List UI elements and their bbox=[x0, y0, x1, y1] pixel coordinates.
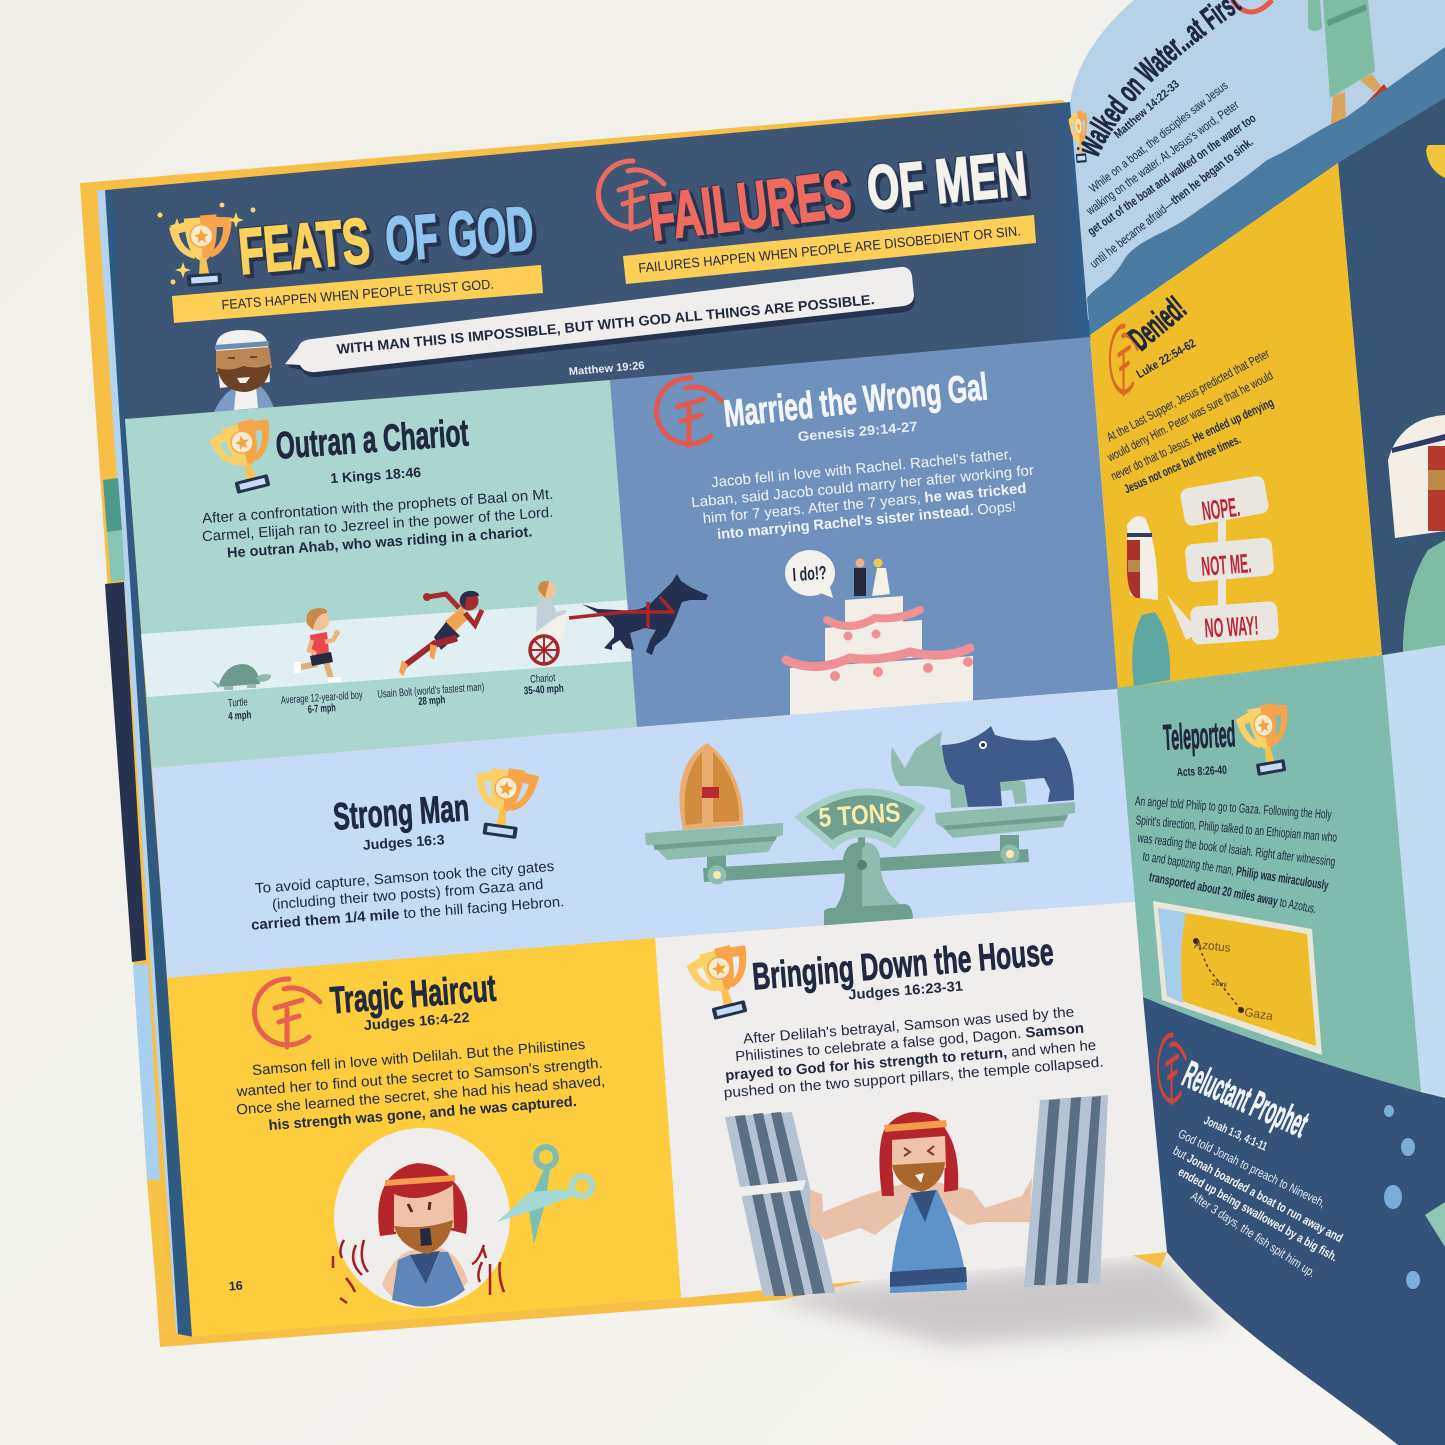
body text: walking on the water. At Jesus's word, Peter bbox=[1083, 98, 1242, 218]
chart labels: speeds: 6-7 mph bbox=[307, 702, 336, 716]
body text: prayed to God for his strength to return, and when he bbox=[725, 1038, 1097, 1084]
body text: get out of the boat and walked on the water too bbox=[1085, 111, 1259, 238]
speech bubble: verse bbox=[285, 267, 915, 377]
heading: Failures of Men bbox=[598, 140, 1030, 254]
icon: header trophy bbox=[168, 213, 236, 288]
racer: boy bbox=[294, 608, 341, 682]
panel: Teleported: Teleported bbox=[1162, 713, 1236, 758]
body text: Carmel, Elijah ran to Jezreel in the power of the Lord. bbox=[202, 505, 554, 545]
sparkles bbox=[158, 202, 256, 284]
body text: until he became afraid—then he began to sink. bbox=[1087, 135, 1256, 271]
speech bubble: I do!?: I do!? bbox=[792, 563, 827, 586]
reference: Judges 16:3 bbox=[362, 831, 445, 853]
speech bubbles: denials: NOT ME. bbox=[1200, 548, 1252, 582]
left page navy margin bbox=[105, 190, 194, 1337]
speech bubbles: denials: NO WAY! bbox=[1204, 611, 1259, 643]
map: Azotus to Gaza: Gaza bbox=[1243, 1005, 1274, 1023]
illustration: robed figure walking on water bbox=[1308, 0, 1388, 138]
illustration: falling hair bbox=[333, 1240, 504, 1303]
chart labels: speeds bbox=[227, 672, 564, 723]
body text: him for 7 years. After the 7 years, he was tricked bbox=[702, 481, 1027, 527]
illustration: wedding cake bbox=[786, 558, 973, 716]
racer: Usain Bolt bbox=[399, 591, 482, 676]
reference: Luke 22:54-62 bbox=[1134, 336, 1198, 381]
body text bbox=[235, 1037, 606, 1134]
speech bubble: I do!? bbox=[785, 550, 835, 598]
body text: Jacob fell in love with Rachel. Rachel's father, bbox=[711, 447, 1013, 491]
icon: trophy bbox=[207, 415, 284, 497]
speech bubble: verse: WITH MAN THIS IS IMPOSSIBLE, BUT WITH GOD ALL THINGS ARE POSSIBLE. bbox=[336, 291, 875, 357]
chart labels: speeds: 35-40 mph bbox=[523, 683, 564, 697]
illustration: Samson pushing pillars bbox=[810, 1112, 1032, 1293]
chart labels: speeds: Average 12-year-old boy bbox=[280, 689, 363, 707]
body text: While on a boat, the disciples saw Jesus bbox=[1086, 78, 1231, 195]
panel title: Tragic Haircut bbox=[329, 968, 498, 1022]
chart labels: speeds: Turtle bbox=[227, 696, 248, 710]
body text bbox=[691, 447, 1035, 543]
body text: would deny Him. Peter was sure that he would bbox=[1104, 368, 1275, 465]
cover corner at lower right bbox=[1130, 1250, 1168, 1268]
body text: (including their two posts) from Gaza and bbox=[271, 877, 544, 913]
page-edge colour tabs bbox=[97, 190, 192, 1335]
body text: but Jonah boarded a boat to run away and bbox=[1171, 1144, 1345, 1245]
partial figure bbox=[1388, 415, 1445, 656]
panel: Outran a Chariot bbox=[125, 380, 637, 768]
icon: F badge bbox=[656, 378, 722, 446]
yellow book cover bbox=[80, 100, 1075, 1347]
partial trophy bbox=[1426, 145, 1445, 178]
partial fish fin bbox=[1425, 1202, 1445, 1247]
speech bubbles: denials: NOPE. bbox=[1200, 492, 1242, 526]
reference: Jonah 1:3, 4:1-11 bbox=[1202, 1113, 1270, 1154]
reference: Acts 8:26-40 bbox=[1176, 763, 1227, 779]
chart labels: speeds: 28 mph bbox=[418, 694, 446, 708]
icon: small trophy bbox=[1068, 110, 1091, 163]
icon: F badge bbox=[1110, 326, 1137, 394]
icon: trophy bbox=[1234, 701, 1298, 778]
reference: Judges 16:4-22 bbox=[363, 1009, 470, 1033]
heading: Feats of God bbox=[158, 194, 536, 288]
spine shading bbox=[1000, 102, 1092, 342]
body text: Once she learned the secret, she had his head shaved, bbox=[236, 1074, 606, 1119]
speed track band bbox=[141, 600, 632, 697]
body text: Philistines to celebrate a false god, Dagon. Samson bbox=[735, 1021, 1085, 1065]
gauge label: 5 TONS bbox=[817, 797, 901, 833]
verse reference: Matthew 19:26 bbox=[568, 360, 645, 378]
reference: Genesis 29:14-27 bbox=[797, 419, 918, 444]
panel: Bringing Down the House bbox=[655, 902, 1168, 1298]
word: Feats: FEATS bbox=[236, 205, 372, 288]
horse and harness bbox=[569, 574, 708, 655]
bubbles bbox=[1384, 1105, 1420, 1289]
failures tagline bar: FAILURES HAPPEN WHEN PEOPLE ARE DISOBEDIENT OR SIN. bbox=[638, 223, 1021, 276]
body text: pushed on the two support pillars, the temple collapsed. bbox=[723, 1054, 1104, 1102]
icon: F badge bbox=[1158, 1035, 1185, 1103]
illustration: left pillar bbox=[725, 1112, 835, 1296]
panel title: Bringing Down the House bbox=[751, 931, 1055, 999]
icon: header F badge bbox=[598, 161, 664, 229]
right page: sky panel bbox=[1068, 0, 1445, 320]
body text bbox=[1135, 793, 1338, 916]
panel: Denied! bbox=[1090, 163, 1382, 689]
icon: F badge bbox=[254, 979, 320, 1047]
body text: his strength was gone, and he was captured. bbox=[268, 1094, 577, 1134]
body text: transported about 20 miles away to Azotus. bbox=[1148, 869, 1318, 916]
body text: never do that to Jesus. He ended up denying bbox=[1109, 395, 1276, 483]
body text: Laban, said Jacob could marry her after working for bbox=[691, 463, 1035, 511]
body text bbox=[202, 487, 554, 562]
icon: F badge top bbox=[1232, 0, 1272, 12]
body text bbox=[1171, 1127, 1345, 1280]
book shadow bbox=[760, 1258, 1230, 1345]
feats tagline bar bbox=[172, 265, 543, 323]
body text: carried them 1/4 mile to the hill facing Hebron. bbox=[251, 894, 565, 934]
map: Azotus to Gaza: 20mi bbox=[1211, 980, 1228, 989]
body text bbox=[251, 859, 565, 934]
map: Azotus to Gaza bbox=[1153, 901, 1322, 1055]
chart labels: speeds: 4 mph bbox=[228, 709, 252, 723]
right light-blue column bbox=[1383, 645, 1445, 1100]
body text: into marrying Rachel's sister instead. Oops! bbox=[717, 499, 1017, 543]
reference: 1 Kings 18:46 bbox=[330, 464, 422, 486]
body text: To avoid capture, Samson took the city gates bbox=[255, 859, 555, 897]
panel: Married the Wrong Gal bbox=[610, 337, 1118, 727]
body text: to and baptizing the man, Philip was miraculously bbox=[1142, 848, 1330, 893]
map: Azotus to Gaza: Azotus bbox=[1193, 937, 1231, 955]
panel title: Strong Man bbox=[332, 787, 470, 839]
body text: At the Last Supper, Jesus predicted that Peter bbox=[1104, 347, 1272, 444]
illustration: Samson losing hair bbox=[334, 1128, 510, 1308]
icon: trophy bbox=[684, 941, 761, 1023]
racer: turtle bbox=[211, 664, 271, 690]
illustration: balance scale with gate and rhinos bbox=[645, 726, 1075, 926]
panel title: Denied! bbox=[1122, 289, 1194, 358]
body text: An angel told Philip to go to Gaza. Following the Holy bbox=[1135, 793, 1332, 822]
body text: God told Jonah to preach to Nineveh, bbox=[1176, 1127, 1328, 1210]
body text: ended up being swallowed by a big fish. bbox=[1176, 1165, 1340, 1264]
icon: trophy bbox=[469, 764, 540, 841]
racer: chariot and rider bbox=[530, 581, 568, 664]
body text: Samson fell in love with Delilah. But the Philistines bbox=[252, 1037, 586, 1079]
speech bubbles: denials bbox=[1167, 475, 1279, 645]
feats tagline bar: FEATS HAPPEN WHEN PEOPLE TRUST GOD. bbox=[221, 277, 494, 312]
character: speaker in header bbox=[214, 330, 274, 412]
body text bbox=[1104, 347, 1276, 496]
water band bbox=[1087, 47, 1445, 335]
panel: Reluctant Prophet bbox=[1143, 997, 1445, 1445]
body text: After a confrontation with the prophets of Baal on Mt. bbox=[202, 487, 554, 527]
body text: Spirit's direction, Philip talked to an Ethiopian man who bbox=[1135, 812, 1338, 845]
illustration: scissors bbox=[497, 1147, 592, 1244]
illustration: right pillar bbox=[1024, 1095, 1108, 1287]
panel title: Married the Wrong Gal bbox=[722, 366, 990, 436]
body text: was reading the book of Isaiah. Right after witnessing bbox=[1136, 830, 1336, 869]
body text: After 3 days, the fish spit him up. bbox=[1188, 1189, 1318, 1280]
word: Of God: OF GOD bbox=[383, 194, 536, 275]
body text: He outran Ahab, who was riding in a chariot. bbox=[227, 524, 533, 562]
panel title: Outran a Chariot bbox=[274, 412, 470, 468]
reference: Judges 16:23-31 bbox=[848, 978, 964, 1003]
reference: Matthew 14:22-33 bbox=[1112, 78, 1182, 141]
body text: Jesus not once but three times. bbox=[1122, 432, 1243, 496]
word: Failures: FAILURES bbox=[645, 156, 855, 254]
left page: header band bbox=[106, 102, 1092, 420]
body text bbox=[723, 1004, 1104, 1102]
word: Of Men: OF MEN bbox=[864, 140, 1030, 224]
panel: Strong Man bbox=[152, 689, 1136, 978]
panel: Teleported bbox=[1117, 655, 1421, 1092]
character: Peter bbox=[1127, 516, 1170, 686]
right dark navy panel bbox=[1338, 98, 1445, 656]
body text: wanted her to find out the secret to Samson's strength. bbox=[235, 1056, 603, 1100]
body text: After Delilah's betrayal, Samson was used by the bbox=[743, 1004, 1075, 1048]
page number: 16 bbox=[228, 1279, 243, 1293]
chart labels: speeds: Usain Bolt (world's fastest man) bbox=[377, 681, 485, 701]
chart labels: speeds: Chariot bbox=[530, 672, 556, 686]
